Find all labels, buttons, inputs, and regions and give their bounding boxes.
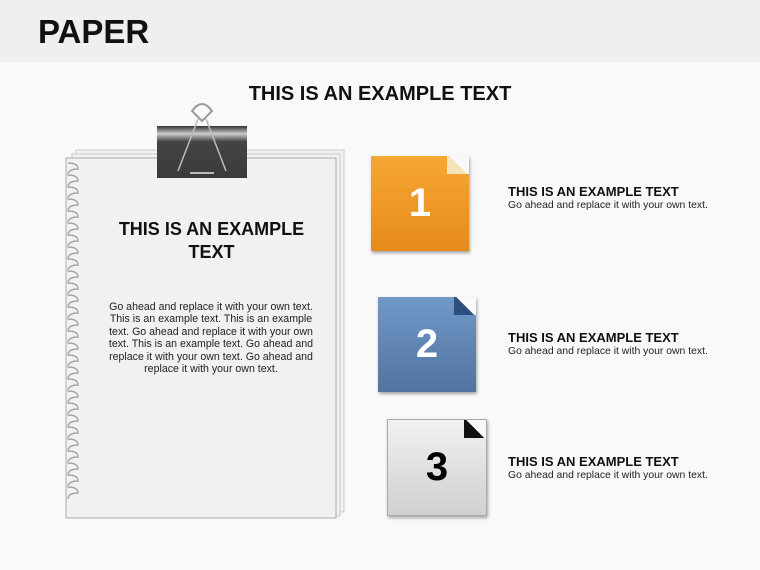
step 3 text: Go ahead and replace it with your own text.	[508, 470, 708, 481]
paper body text: Go ahead and replace it with your own text. This is an example text. This is an example text. Go ahead and replace it with your own text. This is an example text. Go ahead and replace it with your own text. Go ahead and replace it with your own text.	[109, 301, 313, 375]
step 2 text	[508, 330, 708, 357]
icon: binder clip	[157, 103, 247, 178]
step 3 text: THIS IS AN EXAMPLE TEXT	[508, 454, 679, 469]
step 1 text: Go ahead and replace it with your own text.	[508, 200, 708, 211]
step 3 square	[387, 419, 487, 516]
subtitle: THIS IS AN EXAMPLE TEXT	[249, 83, 511, 105]
step 1 square	[371, 156, 469, 251]
paper stack	[66, 150, 344, 518]
header bar	[0, 0, 760, 62]
step 2 text: Go ahead and replace it with your own text.	[508, 346, 708, 357]
step 1 text: THIS IS AN EXAMPLE TEXT	[508, 184, 679, 199]
step 1 square: 1	[409, 181, 431, 225]
step 2 text: THIS IS AN EXAMPLE TEXT	[508, 330, 679, 345]
step 3 text	[508, 454, 708, 481]
curl 2	[454, 297, 476, 315]
step 2 square	[378, 297, 476, 392]
curl 1	[447, 156, 469, 174]
step 3 square: 3	[426, 445, 448, 489]
paper heading: THIS IS AN EXAMPLE TEXT	[119, 219, 304, 262]
step 1 text	[508, 184, 708, 211]
curl 3	[464, 420, 486, 438]
step 2 square: 2	[416, 322, 438, 366]
title: PAPER	[38, 13, 149, 50]
